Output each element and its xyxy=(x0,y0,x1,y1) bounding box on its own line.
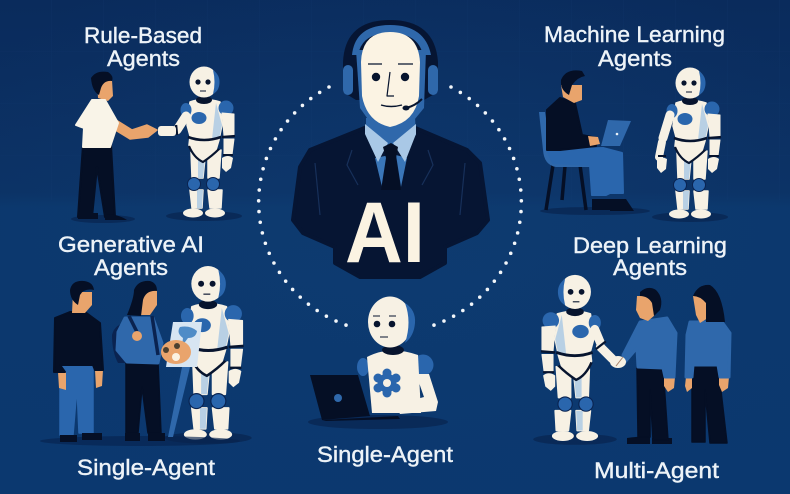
person xyxy=(71,72,157,223)
headset xyxy=(343,20,438,100)
robot bust xyxy=(357,296,438,414)
easel with palette xyxy=(161,322,202,437)
panel: centre single-agent robot with laptop xyxy=(308,296,453,467)
panel: rule-based agents xyxy=(71,23,242,223)
person: woman xyxy=(685,285,730,443)
robot xyxy=(652,68,728,222)
handshake xyxy=(610,356,626,368)
neck and shirt xyxy=(366,118,416,150)
shadow xyxy=(308,415,448,429)
suit xyxy=(293,127,488,277)
label: single-agent: Single-Agent xyxy=(317,442,453,467)
robot xyxy=(164,266,252,444)
heading: Agents xyxy=(598,46,672,71)
person: man xyxy=(623,288,676,444)
gear icon xyxy=(374,368,400,398)
heading: Rule-Based xyxy=(84,23,202,48)
tie xyxy=(381,143,401,190)
collar xyxy=(365,124,416,162)
heading: Agents xyxy=(94,255,168,280)
panel: machine learning agents xyxy=(539,22,728,222)
person on chair with laptop xyxy=(539,70,650,215)
panel: deep learning agents xyxy=(533,233,730,483)
heading: Machine Learning xyxy=(544,22,725,47)
dotted circle xyxy=(259,87,521,328)
face xyxy=(361,32,420,127)
heading xyxy=(84,23,202,71)
robot xyxy=(158,66,242,221)
AI label: AI xyxy=(345,185,425,281)
heading: Agents xyxy=(107,46,180,71)
heading: Agents xyxy=(613,255,687,280)
heading xyxy=(544,22,725,71)
person: woman with backpack xyxy=(112,281,165,441)
label: multi-agent: Multi-Agent xyxy=(594,458,719,483)
laptop xyxy=(310,375,400,421)
label: single-agent: Single-Agent xyxy=(77,455,215,480)
heading xyxy=(573,233,727,280)
heading: Deep Learning xyxy=(573,233,727,258)
panel: generative AI agents xyxy=(40,232,252,480)
heading xyxy=(58,232,204,280)
person: man xyxy=(40,281,240,446)
microphone xyxy=(406,99,422,108)
heading: Generative AI xyxy=(58,232,204,257)
central AI agent figure xyxy=(293,20,488,281)
robot xyxy=(533,275,617,445)
